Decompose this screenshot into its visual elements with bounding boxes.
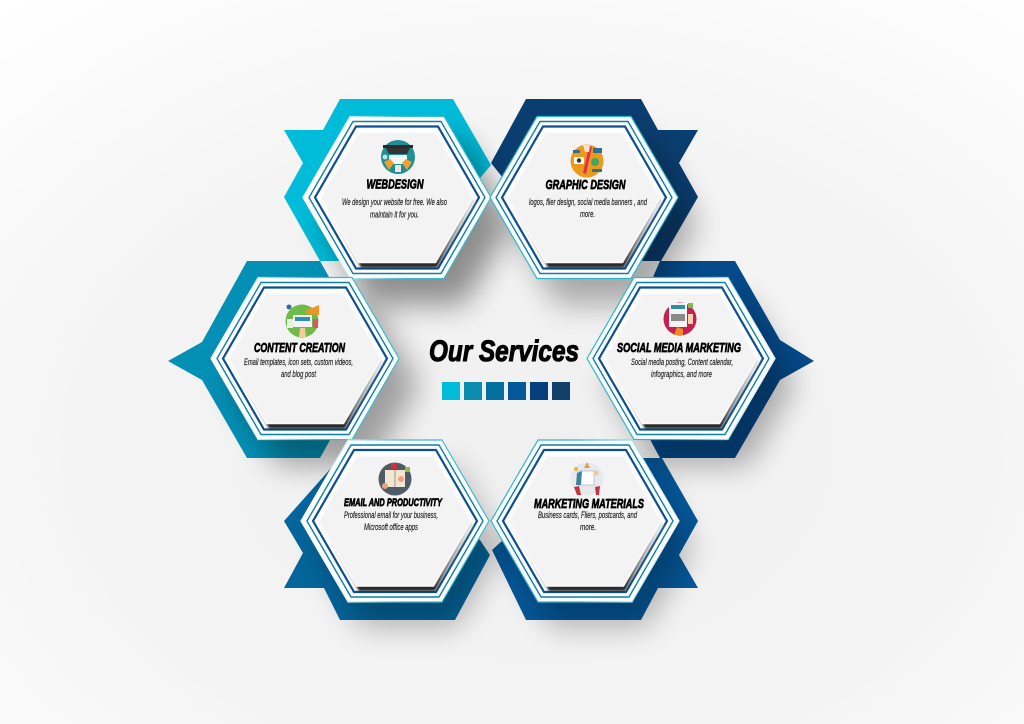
hexagon: social media marketing [587, 278, 795, 466]
heading: email and productivity: EMAIL AND PRODUCTIVITY [344, 497, 443, 509]
text: email line 1: Professional email for your business, [344, 510, 438, 521]
heading: marketing materials: MARKETING MATERIALS [534, 496, 644, 511]
ribbon: marketing materials [492, 458, 698, 620]
text: graphic design line 1: logos, flier design, social media banners , and [529, 197, 647, 208]
icon: webdesign laptop [381, 140, 415, 174]
icon: marketing materials desk [570, 462, 604, 496]
title: Our Services [429, 335, 579, 368]
text: content creation line 2: and blog post [281, 369, 316, 380]
text: graphic design line 2: more. [580, 209, 595, 220]
hexagon: graphic design [490, 116, 698, 304]
ribbon: content creation [168, 261, 340, 458]
hexagon: marketing materials [491, 440, 693, 628]
hexagon: email and productivity [301, 440, 503, 628]
icon: social media tablet [664, 302, 696, 336]
ribbon: webdesign [284, 99, 491, 261]
text: content creation line 1: Email templates, icon sets, custom videos, [244, 357, 353, 368]
text: social media line 2: infographics, and more [651, 369, 712, 380]
hexagon: content creation [211, 278, 419, 466]
text: webdesign line 1: We design your website for free. We also [342, 197, 447, 208]
heading: social media marketing: SOCIAL MEDIA MARKETING [617, 340, 741, 355]
ribbon: graphic design [491, 99, 698, 261]
heading: content creation: CONTENT CREATION [254, 340, 345, 355]
text: social media line 1: Social media posting, Content calendar, [631, 357, 733, 368]
icon: content creation megaphone [286, 304, 319, 338]
colour squares row [442, 382, 570, 400]
hexagon: webdesign [303, 116, 511, 304]
text: marketing line 2: more. [580, 522, 596, 533]
text: email line 2: Microsoft office apps [364, 522, 418, 533]
text: marketing line 1: Business cards, Fliers, postcards, and [538, 510, 637, 521]
heading: webdesign: WEBDESIGN [366, 176, 424, 192]
ribbon: social media marketing [640, 261, 814, 458]
text: webdesign line 2: maintain it for you. [370, 210, 419, 220]
icon: graphic design tools [570, 144, 604, 178]
ribbon: email and productivity [284, 458, 490, 620]
icon: email and productivity book [378, 462, 412, 496]
heading: graphic design: GRAPHIC DESIGN [546, 177, 626, 192]
